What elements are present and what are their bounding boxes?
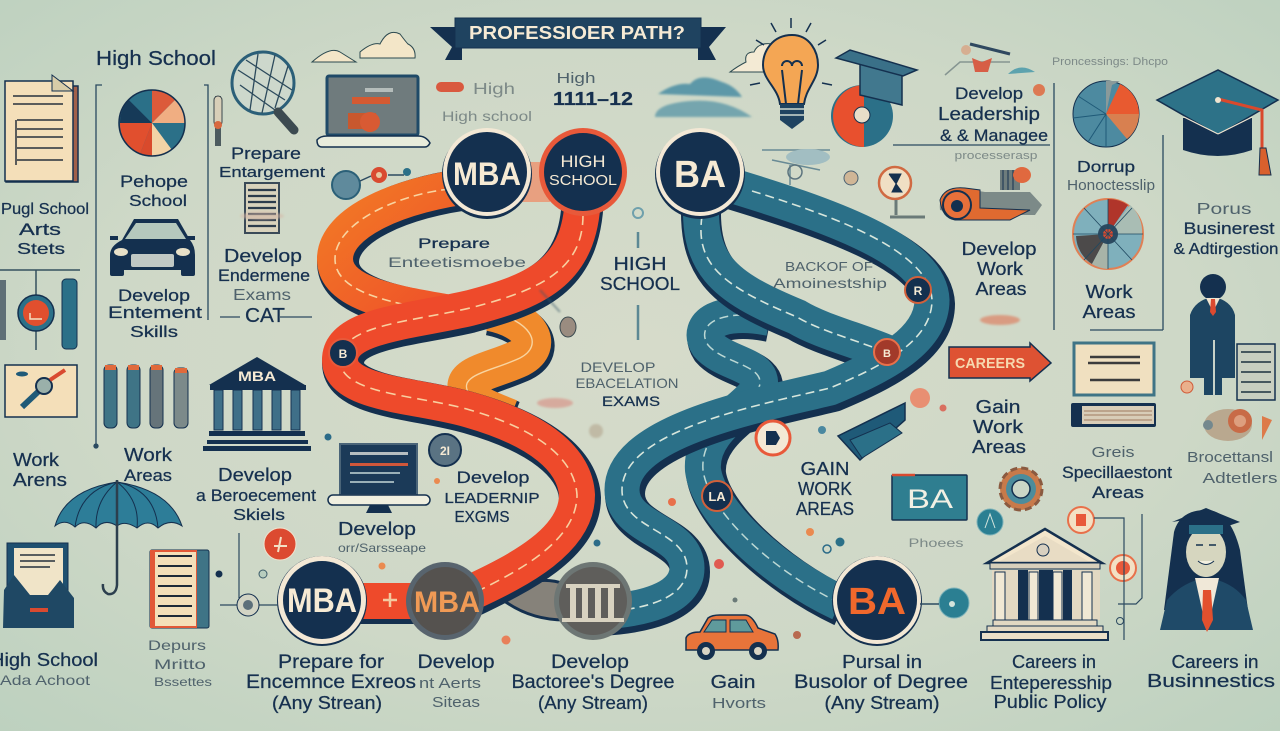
text: lower-left labels: Arens xyxy=(13,470,67,490)
text: right labels: Proncessings: Dhcpo xyxy=(1052,56,1168,68)
icon: four bars xyxy=(104,365,188,428)
text: right labels: Areas xyxy=(972,437,1026,457)
icon: certificate xyxy=(1074,343,1154,395)
text: top-left labels: Stets xyxy=(17,241,65,258)
node: High School: HIGH xyxy=(560,152,606,171)
text: centre labels: EXGMS xyxy=(454,509,510,526)
node: BA bottom xyxy=(832,556,922,646)
text: centre labels: High school xyxy=(442,108,532,124)
text: right labels: Areas xyxy=(976,279,1026,299)
text: centre labels: GAIN xyxy=(800,459,850,479)
text: bottom row labels xyxy=(246,652,1275,713)
text: right labels: Businerest xyxy=(1184,219,1275,238)
text: lower-left labels: Bssettes xyxy=(154,675,212,689)
text: bottom row labels: Develop xyxy=(418,652,494,673)
road: teal branch A xyxy=(600,182,935,616)
icon: graduate woman xyxy=(1160,508,1253,632)
text: right labels: Honoctesslip xyxy=(1067,177,1155,194)
text: centre labels: EXAMS xyxy=(602,393,660,409)
icon: red edged list xyxy=(150,550,209,628)
text: centre labels: WORK xyxy=(798,479,852,499)
text: right labels: Develop xyxy=(955,84,1023,103)
text: centre labels: High xyxy=(473,81,515,98)
text: right labels: Greis xyxy=(1092,444,1134,461)
icon: umbrella xyxy=(55,480,182,594)
node: MBA bottom xyxy=(277,556,397,646)
text: centre labels: 1111–12 xyxy=(553,89,633,109)
text: right labels: Leadership xyxy=(938,104,1040,124)
text: top-left labels: Pehope xyxy=(120,172,188,191)
text: top-left labels: Develop xyxy=(224,246,302,266)
text: centre labels: Develop xyxy=(456,468,530,487)
icon: connector with spiral xyxy=(216,434,332,616)
road: teal branch B xyxy=(701,190,890,358)
careers arrow: CAREERS xyxy=(955,355,1025,372)
icon: blurred blue cloud xyxy=(655,77,752,117)
icon: monitor xyxy=(328,444,430,513)
icon: person in suit xyxy=(1190,274,1235,396)
road badges: B xyxy=(339,347,348,361)
text: right labels: Work xyxy=(977,259,1024,279)
title text: PROFESSIOER PATH? xyxy=(469,23,685,43)
text: bottom row labels: Busolor of Degree xyxy=(794,672,968,693)
text: lower-left labels: Mritto xyxy=(154,656,206,672)
text: right labels: Phoees xyxy=(908,536,964,550)
icon: orange vintage car xyxy=(940,167,1042,220)
text: right labels: Specillaestont xyxy=(1062,463,1172,482)
text: right labels: Dorrup xyxy=(1077,159,1135,176)
text: right labels: Brocettansl xyxy=(1187,449,1273,466)
text: lower-left labels: Areas xyxy=(124,466,172,485)
text: top-left labels: Develop xyxy=(118,286,190,305)
text: centre labels: Prepare xyxy=(418,235,490,251)
text: right labels: Work xyxy=(973,417,1024,437)
text: top-left labels: Skills xyxy=(130,324,178,341)
text: right labels: Adtetlers xyxy=(1202,470,1278,487)
text: bottom row labels: Develop xyxy=(551,652,629,673)
icon: grad cap small xyxy=(838,403,905,460)
text: lower-left labels: orr/Sarsseape xyxy=(338,541,426,555)
road: orange branch xyxy=(466,312,534,421)
road badges xyxy=(329,277,1136,581)
icon: gear xyxy=(1000,468,1042,510)
section dividers xyxy=(94,83,1163,448)
icon: teal dots xyxy=(920,509,1142,640)
text: bottom row labels: Pursal in xyxy=(842,652,922,672)
text: lower-left labels: Work xyxy=(124,445,173,465)
road badges: 2I xyxy=(440,444,450,458)
icon: sign post xyxy=(879,167,925,217)
text: centre labels: HIGH xyxy=(614,254,666,274)
text: right labels: Areas xyxy=(1082,302,1136,322)
icon: book document xyxy=(3,543,74,628)
text: top-left labels: Prepare xyxy=(231,144,301,163)
text: bottom row labels: Hvorts xyxy=(712,695,766,712)
text: right labels: Develop xyxy=(962,239,1036,259)
road: red link between MBA nodes xyxy=(355,583,425,624)
text: bottom row labels: Careers in xyxy=(1012,652,1096,672)
icon: colour wheel xyxy=(1073,199,1143,269)
text: bottom row labels: Gain xyxy=(710,672,756,692)
text: bottom row labels: Prepare for xyxy=(278,652,385,673)
road: teal loop C xyxy=(703,315,843,607)
icon: pie chart left xyxy=(119,90,185,156)
text: right labels: & Adtirgestion xyxy=(1174,241,1278,258)
icon: small marks xyxy=(378,208,946,644)
icon: navy car xyxy=(110,219,195,276)
icon: BA sign xyxy=(892,475,967,520)
text: bottom row labels: Siteas xyxy=(432,694,480,711)
icon: clouds xyxy=(312,32,415,62)
node: MBA top: MBA xyxy=(453,156,521,192)
text: top-left labels xyxy=(1,48,326,341)
text: bottom row labels: Bactoree's Degree xyxy=(512,672,674,693)
text: top-left labels: High School xyxy=(96,48,216,70)
text: lower-left labels: Depurs xyxy=(148,637,206,653)
icon: small connector pin xyxy=(332,167,411,199)
icon: pie chart right xyxy=(1073,81,1139,147)
text: top-left labels: Endermene xyxy=(218,266,310,285)
icon: orange car xyxy=(686,615,778,660)
text: lower-left labels: Develop xyxy=(218,465,292,485)
icon: document right xyxy=(1181,344,1275,400)
icon: BA sign: BA xyxy=(907,484,953,514)
text: lower-left labels: Skiels xyxy=(233,507,285,524)
text: centre labels: Amoinestship xyxy=(773,275,887,291)
text: top-left labels: School xyxy=(129,193,187,210)
text: centre labels: SCHOOL xyxy=(600,274,680,294)
icon: red donut and cap xyxy=(831,50,917,147)
icon: document left xyxy=(5,75,78,182)
road: grey connector xyxy=(503,580,565,620)
text: bottom row labels: Public Policy xyxy=(994,692,1106,712)
node: High School xyxy=(539,128,627,216)
icon: temple right xyxy=(981,529,1108,640)
text: right labels: Porus xyxy=(1196,201,1252,218)
text: lower-left labels: Work xyxy=(13,450,60,470)
icon: light bulb xyxy=(750,18,832,129)
text: right labels: Areas xyxy=(1092,483,1144,502)
text: bottom row labels: Enteperesship xyxy=(990,673,1112,693)
icon: magnifier xyxy=(232,52,294,130)
text: lower-left labels: Ada Achoot xyxy=(0,672,90,688)
text: top-left labels: Entargement xyxy=(219,164,326,181)
text: right labels: Gain xyxy=(976,397,1020,417)
text: centre labels: AREAS xyxy=(796,499,854,519)
text: right labels xyxy=(908,56,1278,550)
node: MBA grey xyxy=(406,562,484,640)
title banner xyxy=(430,18,726,60)
icon: brain cluster xyxy=(1203,409,1272,441)
icon: big graduation cap xyxy=(1157,70,1278,175)
road: link between top nodes xyxy=(520,162,550,202)
icon: MBA temple: MBA xyxy=(238,368,276,384)
node: columns grey xyxy=(554,562,632,640)
text: bottom row labels: Careers in xyxy=(1172,652,1258,672)
text: lower-left labels: Develop xyxy=(338,519,416,539)
icon: faded map sketch xyxy=(762,149,858,185)
road badges: R xyxy=(914,284,923,298)
text: bottom row labels: Businnestics xyxy=(1147,671,1275,691)
text: centre labels: Enteetismoebe xyxy=(388,254,526,270)
road badges: LA xyxy=(708,489,726,504)
text: top-left labels: Pugl School xyxy=(1,201,89,218)
text: centre labels: LEADERNIP xyxy=(444,490,540,507)
text: centre labels xyxy=(388,70,887,526)
road badges: B xyxy=(883,348,891,360)
icon: laptop xyxy=(317,76,430,147)
icon: closed book xyxy=(1071,403,1156,427)
text: lower-left labels: a Beroecement xyxy=(196,486,316,505)
text: top-left labels: Arts xyxy=(19,220,61,239)
faint sketches xyxy=(240,212,1020,438)
text: right labels: & & Managee xyxy=(940,126,1048,145)
text: bottom row labels: nt Aerts xyxy=(419,675,481,692)
icon: cloud near bulb xyxy=(730,44,782,72)
icon: MBA temple xyxy=(203,357,311,451)
node: BA bottom: BA xyxy=(848,581,906,623)
text: right labels: processerasp xyxy=(954,150,1038,162)
node: BA top: BA xyxy=(674,154,726,196)
careers arrow xyxy=(949,343,1051,381)
text: bottom row labels: (Any Strean) xyxy=(272,693,382,713)
icon: thermometer xyxy=(214,96,222,146)
text: top-left labels: Entement xyxy=(108,303,202,322)
node: MBA top xyxy=(442,128,532,219)
icon: key card xyxy=(5,365,77,417)
text: centre labels: High xyxy=(556,70,596,87)
node: BA top xyxy=(655,128,745,219)
text: centre labels: EBACELATION xyxy=(576,375,678,391)
text: bottom row labels: (Any Stream) xyxy=(538,693,648,713)
road: red main xyxy=(340,190,583,597)
node: MBA grey: MBA xyxy=(414,586,480,619)
icon: sketch tools xyxy=(945,44,1045,96)
icon: striped notebook xyxy=(245,183,279,233)
text: lower-left labels xyxy=(0,445,426,689)
node: MBA bottom: MBA xyxy=(287,582,357,620)
text: bottom row labels: Encemnce Exreos xyxy=(246,672,416,693)
text: top-left labels: CAT xyxy=(245,305,285,327)
text: top-left labels: Exams xyxy=(233,287,291,304)
text: centre labels: DEVELOP xyxy=(580,359,656,375)
icon: hanging items panel xyxy=(0,270,80,350)
node: High School: SCHOOL xyxy=(549,172,617,189)
text: bottom row labels: (Any Stream) xyxy=(824,693,940,713)
text: right labels: Work xyxy=(1086,282,1134,302)
road: red-orange upper loop xyxy=(335,185,475,316)
text: centre labels: BACKOF OF xyxy=(785,259,873,274)
